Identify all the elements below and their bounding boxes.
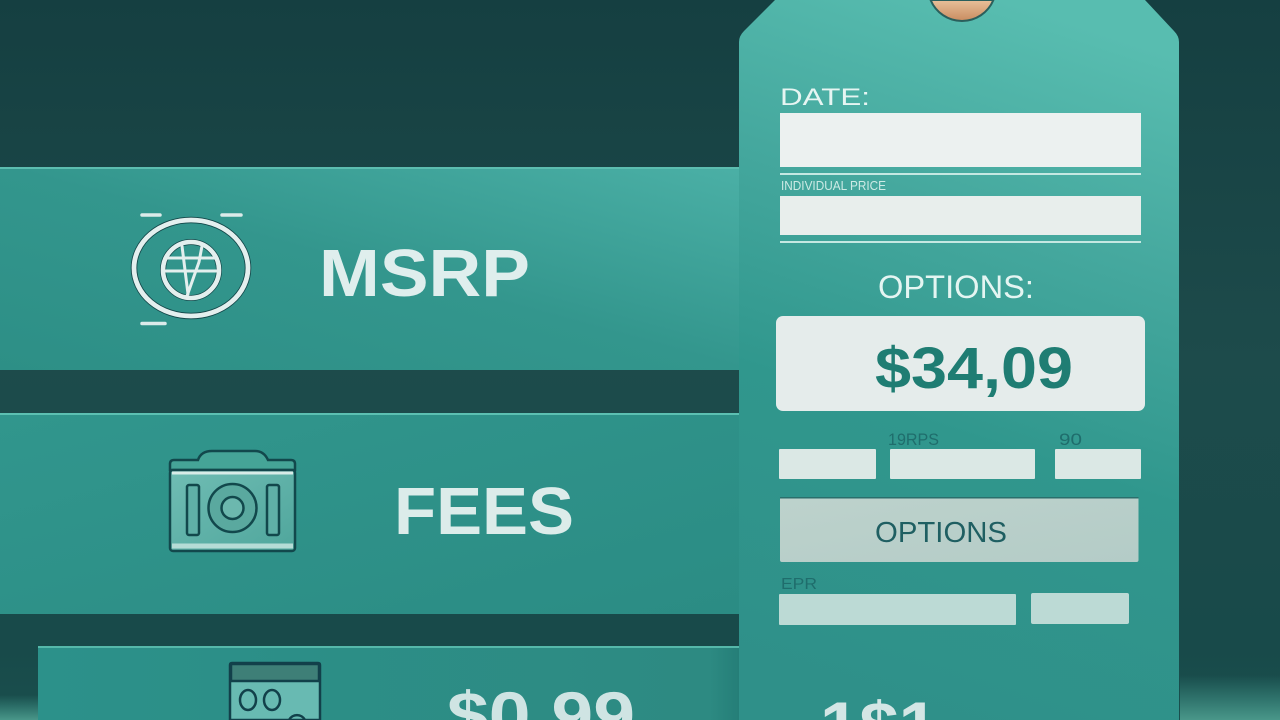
panel: price tag (739, 0, 1179, 720)
options button label: OPTIONS (875, 517, 1007, 549)
small labels: 19RPS (888, 430, 939, 449)
panel: MSRP bar (0, 167, 745, 370)
panel: price bar (38, 646, 745, 720)
small labels: 90 (1059, 430, 1082, 449)
options button (780, 497, 1138, 562)
label: options heading: OPTIONS: (878, 269, 1034, 305)
label: MSRP: MSRP (319, 236, 530, 311)
fields lower row (779, 593, 1129, 625)
icon: tag grommet (931, 0, 993, 21)
panel: FEES bar (0, 413, 745, 614)
label: date: DATE: (780, 84, 870, 111)
price value: $34,09 (875, 336, 1073, 401)
small label: lower: EPR (781, 576, 817, 593)
icon: calculator (230, 663, 320, 720)
label: FEES: FEES (394, 474, 574, 549)
label: small caption: INDIVIDUAL PRICE (781, 178, 886, 193)
price box (776, 316, 1145, 411)
icon: globe in ring (134, 215, 248, 324)
field: second (780, 196, 1141, 235)
fields row (779, 449, 1141, 479)
small labels (888, 430, 1082, 449)
icon: camera (170, 451, 295, 551)
field: top (780, 113, 1141, 167)
